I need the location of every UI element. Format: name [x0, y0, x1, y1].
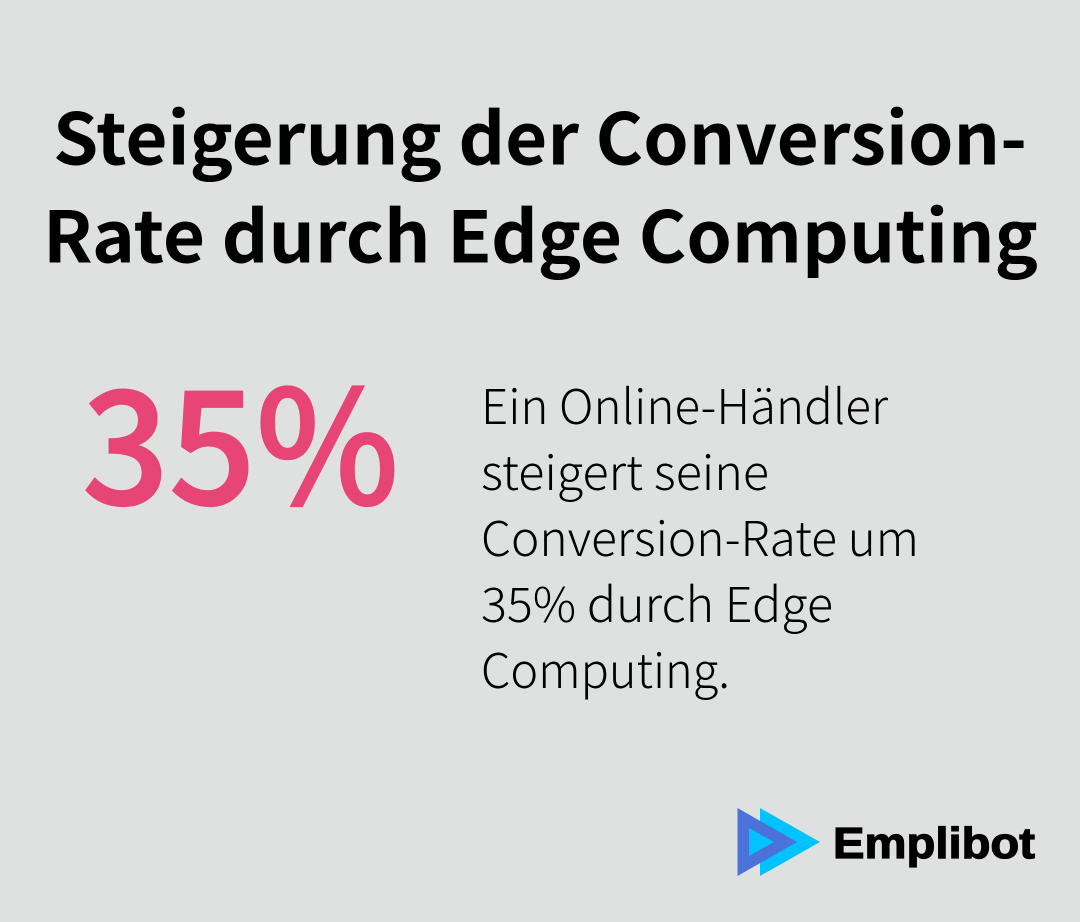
logo wordmark: Emplibot [833, 819, 1035, 868]
title: Steigerung der Conversion- [53, 84, 1027, 186]
description text: 35% durch Edge [481, 566, 833, 636]
title: Rate durch Edge Computing [43, 182, 1038, 284]
description text: steigert seine [481, 434, 769, 504]
description text: Computing. [481, 632, 730, 702]
description text: Conversion-Rate um [481, 500, 919, 570]
description text [481, 368, 919, 702]
title [43, 84, 1038, 284]
description text: Ein Online-Händler [481, 368, 889, 438]
big stat: 35%: 35% [82, 323, 399, 550]
icon: play triangles [738, 808, 820, 876]
logo: Emplibot [738, 808, 1035, 876]
